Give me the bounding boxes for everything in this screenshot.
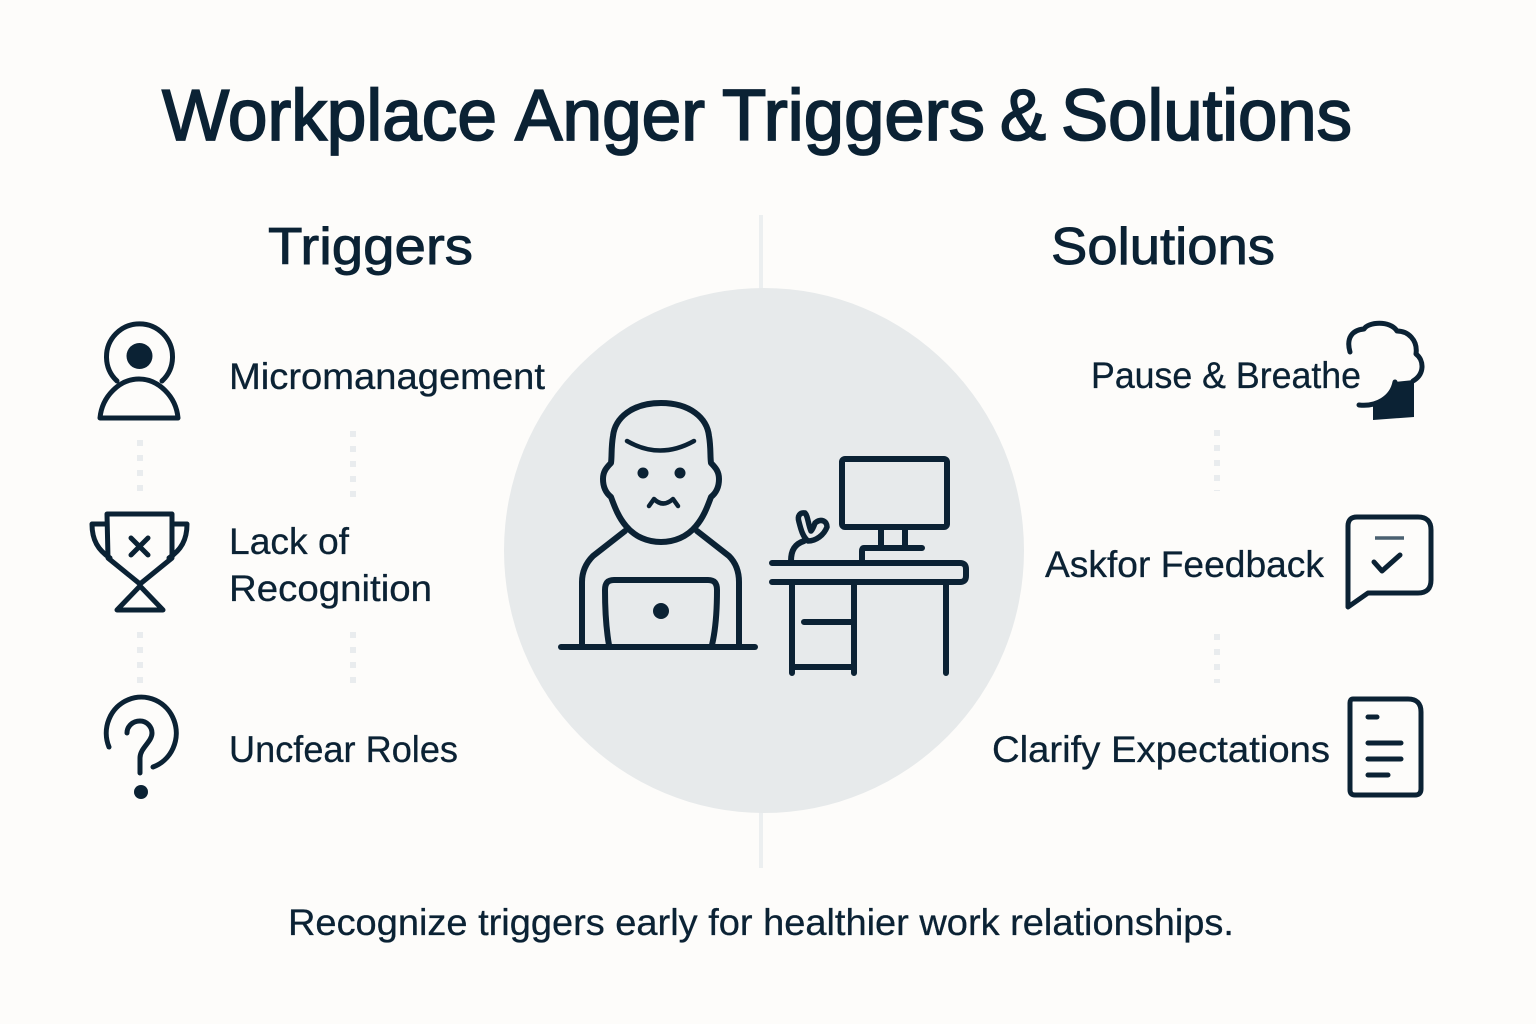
heading: triggers: Triggers bbox=[268, 218, 473, 276]
icon: speech bubble with check bbox=[1348, 517, 1431, 607]
title bbox=[162, 76, 1352, 156]
icon: document with lines bbox=[1350, 699, 1421, 795]
icon: trophy with x bbox=[92, 514, 187, 610]
title: Workplace bbox=[162, 76, 497, 156]
trigger: lack of recognition bbox=[92, 514, 432, 610]
trigger: unclear roles bbox=[106, 697, 458, 799]
label: Lack of bbox=[229, 521, 350, 562]
heading: solutions: Solutions bbox=[1051, 218, 1275, 276]
title: Triggers bbox=[722, 76, 985, 156]
solution: clarify expectations bbox=[992, 699, 1421, 795]
title: & bbox=[1000, 76, 1046, 156]
label bbox=[229, 521, 432, 609]
solution: pause and breathe bbox=[1091, 323, 1422, 420]
title: Anger bbox=[515, 76, 705, 156]
illustration: desk with monitor and plant bbox=[772, 459, 966, 673]
trigger: micromanagement bbox=[100, 324, 546, 418]
label: Clarify Expectations bbox=[992, 729, 1330, 770]
icon: head with cloud bbox=[1349, 323, 1422, 420]
label: Uncfear Roles bbox=[229, 729, 458, 770]
label: Recognition bbox=[229, 568, 432, 609]
central circle illustration bbox=[504, 288, 1024, 813]
label: Pause & Breathe bbox=[1091, 355, 1361, 396]
label: Askfor Feedback bbox=[1045, 544, 1324, 585]
title: Solutions bbox=[1061, 76, 1352, 156]
icon: webcam person bbox=[100, 324, 178, 418]
icon: question mark bbox=[106, 697, 176, 799]
solution: ask for feedback bbox=[1045, 517, 1431, 607]
footer message: Recognize triggers early for healthier work relationships. bbox=[288, 902, 1234, 943]
illustration: angry person at laptop bbox=[561, 403, 755, 647]
label: Micromanagement bbox=[229, 356, 546, 397]
